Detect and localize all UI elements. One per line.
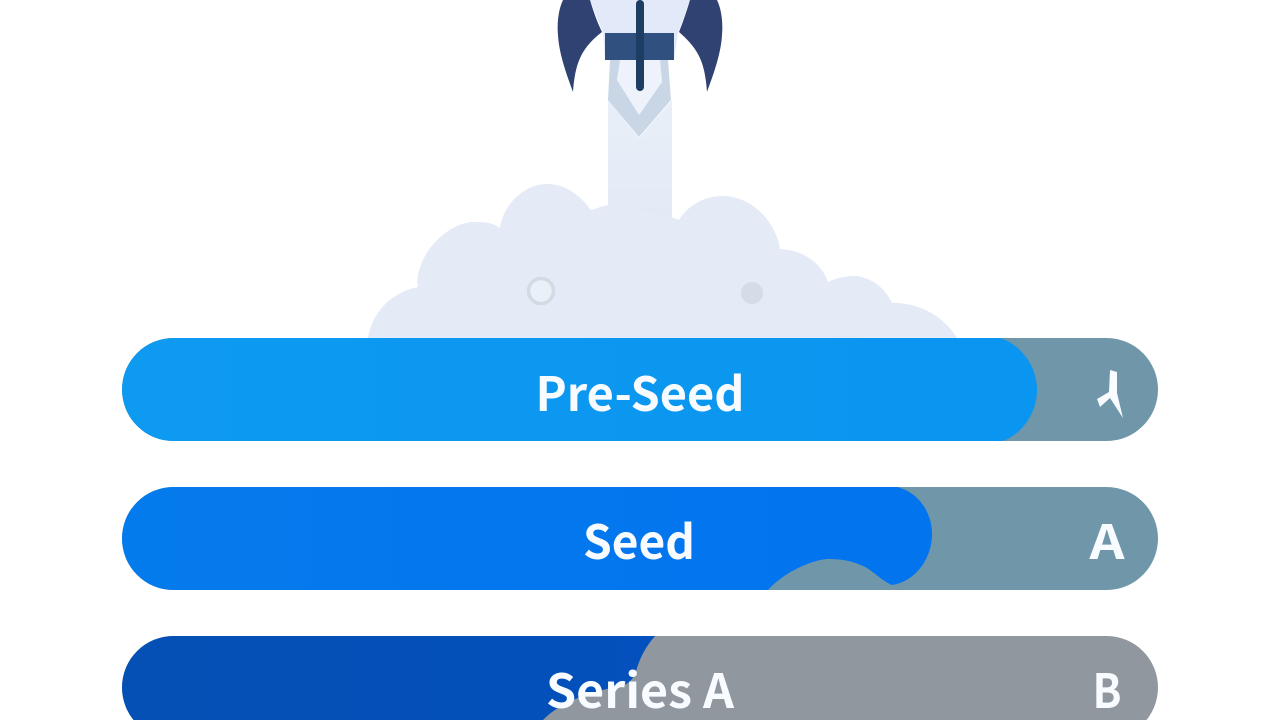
left fin xyxy=(558,0,602,92)
bar track xyxy=(122,338,1158,441)
bar track xyxy=(122,636,1158,720)
label: Seed xyxy=(583,504,695,573)
cloud ring xyxy=(528,278,554,304)
flame inner glow xyxy=(617,60,662,115)
bar: Pre-Seed xyxy=(122,338,1158,441)
rocket band xyxy=(605,33,674,60)
flame chevron xyxy=(608,60,671,137)
rocket center bar xyxy=(636,0,644,91)
bar fill xyxy=(122,487,932,590)
bar: Seed xyxy=(122,487,1158,590)
garbled glyph xyxy=(1097,370,1123,418)
bar: Series A xyxy=(122,636,1158,720)
rocket xyxy=(558,0,722,137)
exhaust column xyxy=(608,100,672,222)
cloud dot xyxy=(741,282,763,304)
bar fill xyxy=(122,338,1037,441)
label: Pre-Seed xyxy=(536,356,744,425)
bar fill xyxy=(122,636,655,720)
smoke cloud xyxy=(368,184,957,338)
rocket body xyxy=(590,0,690,60)
label: Series A xyxy=(546,653,735,720)
right fin xyxy=(679,0,722,92)
next stage letter: B xyxy=(1092,653,1122,720)
next stage letter: A xyxy=(1088,504,1125,573)
bar track xyxy=(122,487,1158,590)
